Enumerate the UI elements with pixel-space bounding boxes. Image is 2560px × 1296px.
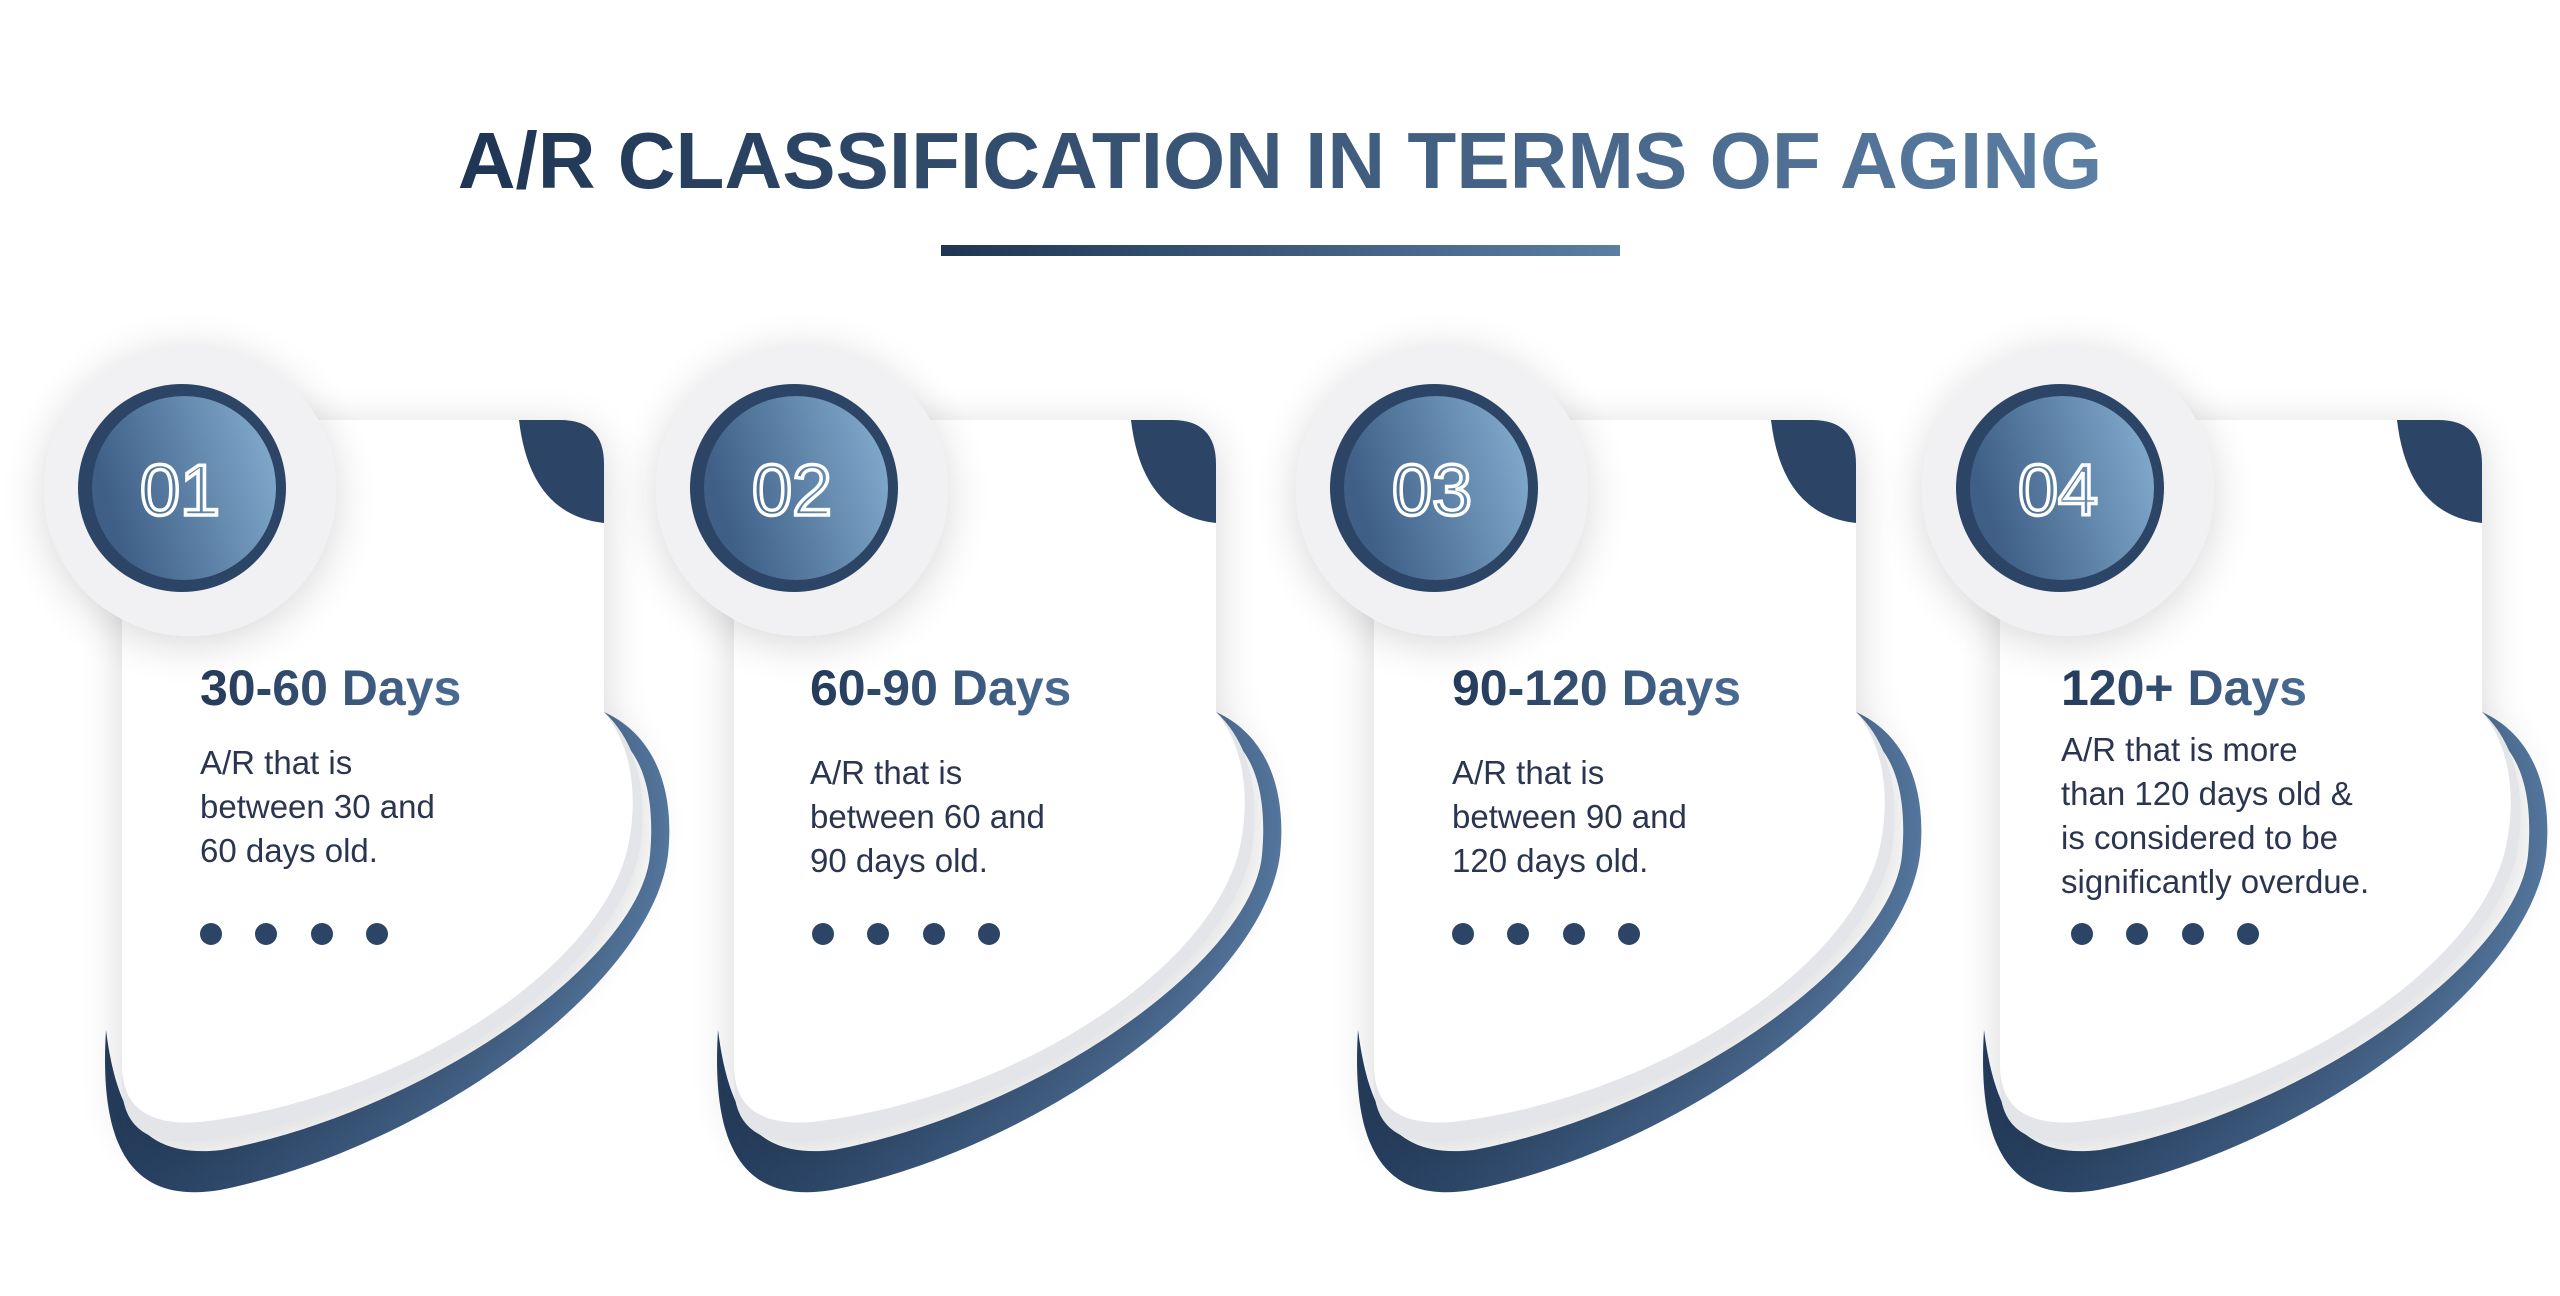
panel: card 3	[1296, 344, 1921, 1192]
body 3: A/R that is	[1452, 754, 1604, 791]
body 2: A/R that is	[810, 754, 962, 791]
number 01: 01	[140, 451, 220, 531]
body 3: between 90 and	[1452, 798, 1687, 835]
body 3: 120 days old.	[1452, 842, 1648, 879]
body 2: between 60 and	[810, 798, 1045, 835]
title underline	[941, 245, 1620, 256]
body 1: A/R that is	[200, 744, 352, 781]
dots 4	[2071, 923, 2259, 945]
heading 2: 60-90 Days	[810, 660, 1071, 716]
body 2: 90 days old.	[810, 842, 988, 879]
number 04: 04	[2018, 451, 2098, 531]
body 1: 60 days old.	[200, 832, 378, 869]
body 4: than 120 days old &	[2061, 775, 2353, 812]
body 4: A/R that is more	[2061, 731, 2298, 768]
number 03: 03	[1392, 451, 1472, 531]
title: A/R CLASSIFICATION IN TERMS OF AGING	[458, 116, 2102, 205]
heading 4: 120+ Days	[2061, 660, 2307, 716]
body 4: is considered to be	[2061, 819, 2338, 856]
panel: card 4	[1922, 344, 2547, 1192]
heading 3: 90-120 Days	[1452, 660, 1741, 716]
dots 2	[812, 923, 1000, 945]
number 02: 02	[752, 451, 832, 531]
dots 1	[200, 923, 388, 945]
heading 1: 30-60 Days	[200, 660, 461, 716]
dots 3	[1452, 923, 1640, 945]
panel: card 2	[656, 344, 1281, 1192]
body 4: significantly overdue.	[2061, 863, 2369, 900]
body 1: between 30 and	[200, 788, 435, 825]
panel: card 1	[44, 344, 669, 1192]
